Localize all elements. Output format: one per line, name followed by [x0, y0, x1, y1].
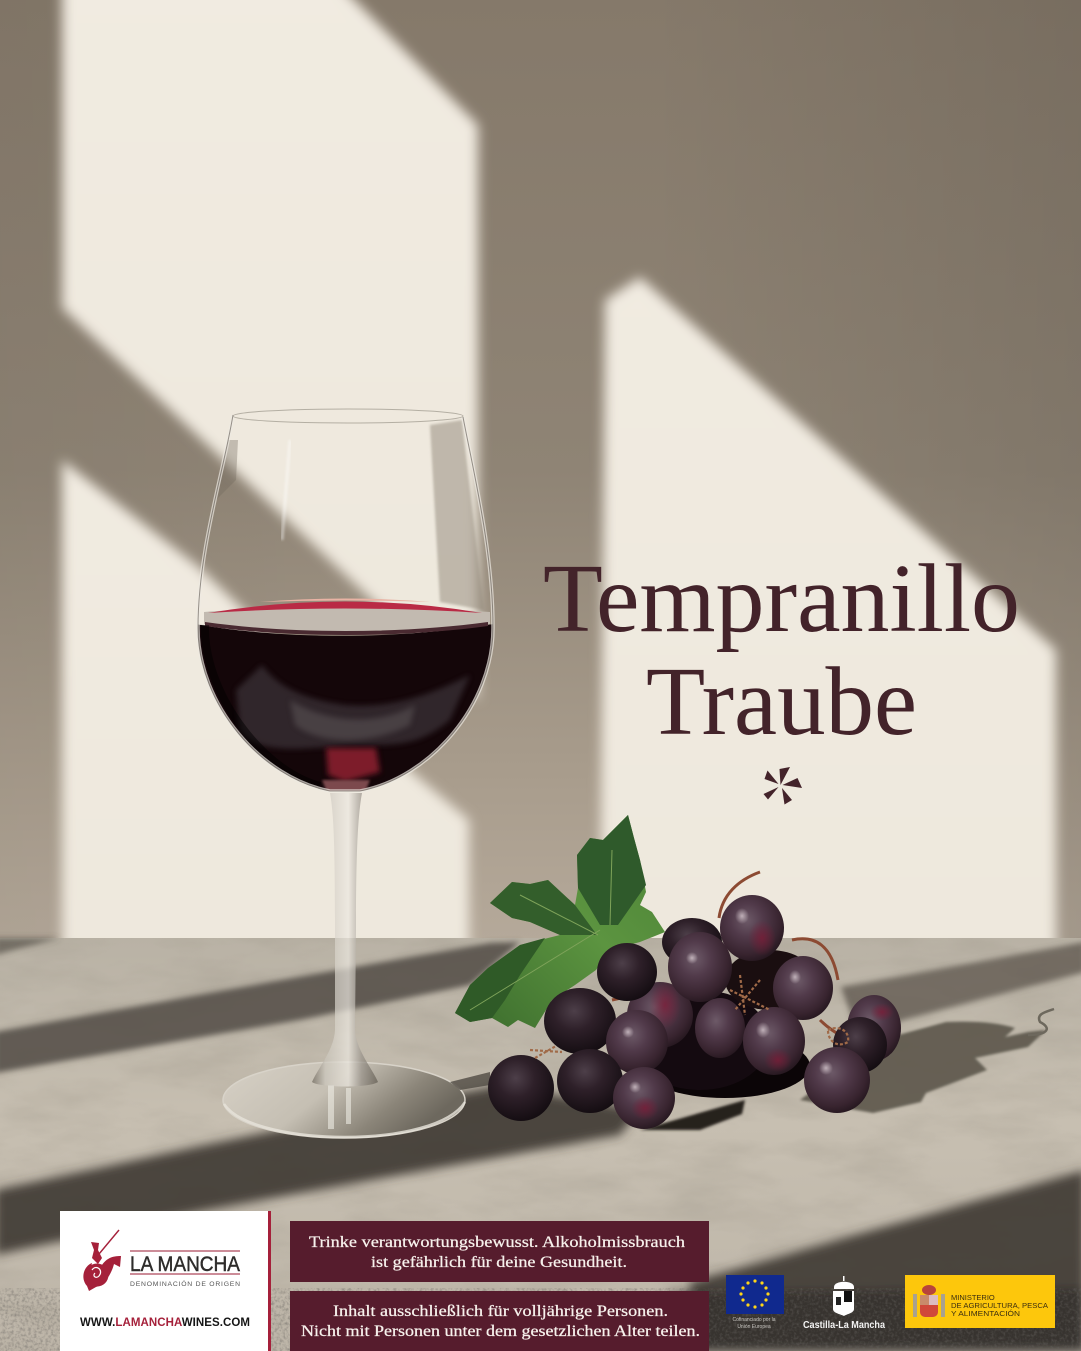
- title: [543, 545, 1020, 756]
- logo: Spanish ministry: Y ALIMENTACIÓN: [951, 1309, 1020, 1318]
- icon: asterisk ornament: [764, 767, 802, 804]
- background: stone table with light bands: [0, 938, 1081, 1351]
- vine leaf: [455, 815, 665, 1028]
- title: Traube: [646, 648, 917, 756]
- grape bunch: [488, 872, 901, 1129]
- callout: responsible drinking: ist gefährlich für deine Gesundheit.: [371, 1254, 627, 1271]
- callout: adults only: [290, 1291, 709, 1351]
- callout: responsible drinking: Trinke verantwortungsbewusst. Alkoholmissbrauch: [309, 1234, 685, 1251]
- background: sunlit wall: [0, 0, 1081, 950]
- logo: Spanish ministry: DE AGRICULTURA, PESCA: [951, 1301, 1048, 1310]
- panel: La Mancha logo card: [60, 1211, 271, 1351]
- logo: Castilla-La Mancha: Castilla-La Mancha: [803, 1319, 885, 1331]
- wordmark: [130, 1250, 240, 1288]
- icon: coat of arms: [913, 1285, 945, 1317]
- callout: adults only: Inhalt ausschließlich für volljährige Personen.: [333, 1303, 668, 1320]
- logo: Castilla-La Mancha: [803, 1276, 885, 1331]
- glass stem: [312, 793, 378, 1086]
- icon: Don Quixote rider: [83, 1230, 121, 1291]
- website: WWW.LAMANCHAWINES.COM: [80, 1317, 250, 1329]
- wine glass: [190, 409, 500, 1138]
- grape shadow on table: [450, 1009, 1054, 1130]
- icon: EU flag: Unión Europea: [737, 1324, 771, 1330]
- logo: Spanish ministry: MINISTERIO: [951, 1293, 995, 1302]
- grape stems: [612, 872, 848, 1040]
- icon: EU flag: [726, 1275, 784, 1330]
- callout: responsible drinking: [290, 1221, 709, 1282]
- callout: adults only: Nicht mit Personen unter dem gesetzlichen Alter teilen.: [301, 1323, 700, 1340]
- glass foot: [223, 1062, 465, 1138]
- wordmark: LA MANCHA: [130, 1253, 240, 1276]
- wordmark: DENOMINACIÓN DE ORIGEN: [130, 1279, 240, 1288]
- wine: [190, 598, 500, 800]
- icon: EU flag: Cofinanciado por la: [732, 1317, 776, 1323]
- dried pedicels: [530, 975, 848, 1058]
- glass bowl: [190, 409, 500, 800]
- title: Tempranillo: [543, 545, 1020, 653]
- logo: Spanish ministry: [905, 1275, 1055, 1328]
